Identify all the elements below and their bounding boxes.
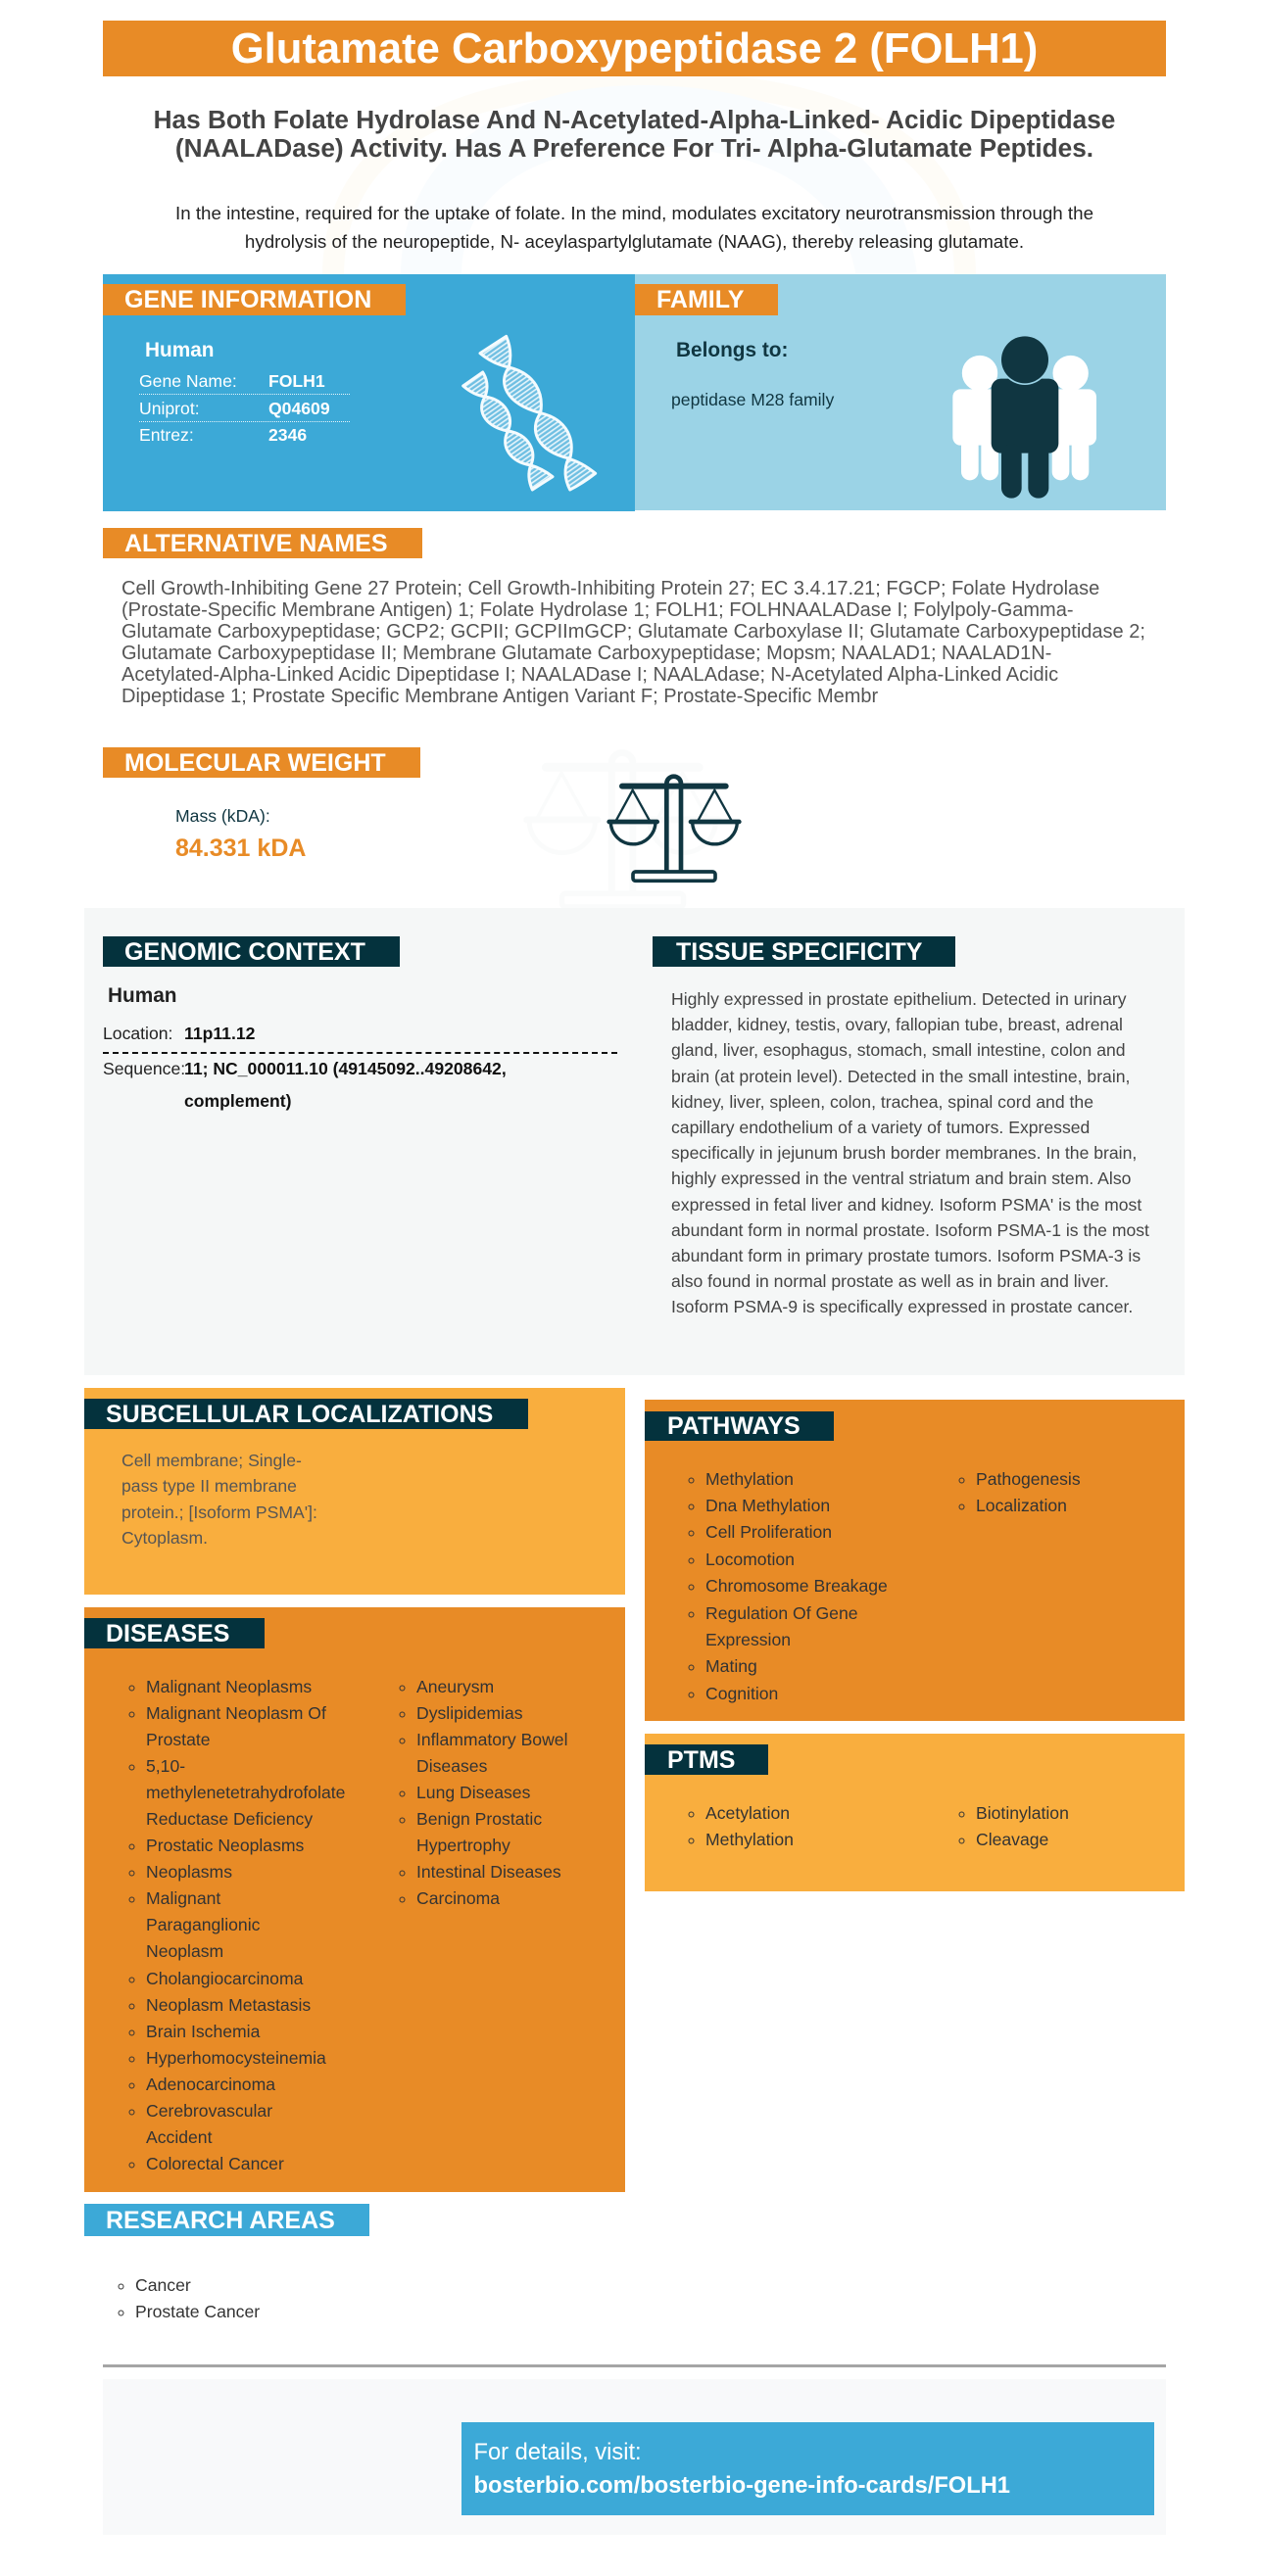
gene name row — [139, 369, 350, 395]
gene name row: Gene Name: — [139, 371, 237, 391]
tissue specificity text: expressed in fetal liver and kidney. Isoform PSMA' is the most — [671, 1195, 1141, 1215]
title: Glutamate Carboxypeptidase 2 (FOLH1) — [231, 25, 1038, 72]
heading: diseases: DISEASES — [106, 1620, 229, 1647]
panel: family — [635, 274, 1166, 510]
diseases list column 2: Hypertrophy — [416, 1836, 510, 1855]
heading: diseases — [84, 1618, 265, 1648]
panel: diseases — [84, 1607, 625, 2192]
alternative names text: (Prostate-Specific Membrane Antigen) 1; Folate Hydrolase 1; FOLH1; FOLHNAALADase I; Folylpoly-Gamma- — [121, 599, 1073, 621]
callout label: For details, visit: — [474, 2439, 642, 2464]
panel: genomic context and tissue specificity — [84, 908, 1185, 1375]
pathways list column 1: Chromosome Breakage — [705, 1576, 888, 1596]
subcellular text: pass type II membrane — [121, 1476, 297, 1496]
sequence row: 11; NC_000011.10 (49145092..49208642, — [184, 1059, 507, 1078]
pathways list column 1: Methylation — [705, 1469, 794, 1489]
alternative names text — [121, 578, 1145, 707]
diseases list column 1: methylenetetrahydrofolate — [146, 1783, 345, 1802]
tissue specificity text: bladder, kidney, testis, ovary, fallopian tube, breast, adrenal — [671, 1015, 1123, 1034]
diseases list column 1: Hyperhomocysteinemia — [146, 2048, 326, 2068]
diseases list column 1: Adenocarcinoma — [146, 2075, 275, 2094]
gene name row: FOLH1 — [268, 371, 325, 391]
alternative names text: Cell Growth-Inhibiting Gene 27 Protein; Cell Growth-Inhibiting Protein 27; EC 3.4.17.21; FGCP; Folate Hydrolase — [121, 578, 1099, 599]
pathways list column 2: Pathogenesis — [976, 1469, 1081, 1489]
panel: gene information — [103, 274, 635, 511]
ptms list column 1: Methylation — [705, 1830, 794, 1849]
diseases list column 2: Inflammatory Bowel — [416, 1730, 568, 1749]
pathways list column 1 — [688, 1469, 888, 1703]
pathways list column 1: Expression — [705, 1630, 791, 1649]
divider — [103, 2364, 1166, 2366]
ptms list column 2 — [958, 1802, 1069, 1849]
belongs to label: Belongs to: — [676, 339, 788, 361]
ptms list column 2: Cleavage — [976, 1830, 1048, 1849]
location row: Location: — [103, 1024, 172, 1043]
pathways list column 1: Locomotion — [705, 1550, 795, 1569]
tissue specificity text: highly expressed in the ventral striatum and brain stem. Also — [671, 1169, 1131, 1188]
alternative names text: Acetylated-Alpha-Linked Acidic Dipeptidase I; NAALADase I; NAALAdase; N-Acetylated Alpha-Linked Acidic — [121, 664, 1058, 686]
entrez row — [139, 425, 307, 445]
description — [175, 202, 1093, 252]
icon: group of people — [952, 336, 1096, 499]
background watermark — [0, 0, 1262, 294]
tissue specificity text: abundant form in primary prostate tumors. Isoform PSMA-3 is — [671, 1246, 1141, 1265]
diseases list column 1 — [129, 1677, 345, 2173]
subtitle — [154, 104, 1115, 163]
pathways list column 1: Mating — [705, 1656, 757, 1676]
diseases list column 1: Brain Ischemia — [146, 2022, 260, 2041]
tissue specificity text — [671, 989, 1149, 1316]
diseases list column 1: Neoplasm — [146, 1941, 223, 1961]
subtitle: (NAALADase) Activity. Has A Preference For Tri- Alpha-Glutamate Peptides. — [175, 133, 1093, 163]
tissue specificity text: also found in normal prostate as well as in brain and liver. — [671, 1271, 1109, 1291]
heading: tissue specificity: TISSUE SPECIFICITY — [676, 938, 922, 966]
diseases list column 1: Prostatic Neoplasms — [146, 1836, 304, 1855]
diseases list column 1: Cerebrovascular — [146, 2101, 272, 2121]
subcellular text — [121, 1451, 317, 1548]
ptms list column 1 — [688, 1802, 794, 1849]
sequence row — [103, 1059, 507, 1111]
pathways list column 1: Cell Proliferation — [705, 1522, 832, 1542]
ptms list column 1: Acetylation — [705, 1802, 790, 1822]
family value: peptidase M28 family — [671, 390, 834, 409]
diseases list column 1: Malignant Neoplasms — [146, 1677, 312, 1696]
icon: dna helix — [461, 335, 598, 492]
heading: family: FAMILY — [656, 286, 744, 313]
icon: balance scale — [607, 774, 742, 883]
ptms list column 2: Biotinylation — [976, 1802, 1069, 1822]
heading: ptms: PTMS — [667, 1746, 735, 1774]
uniprot row: Q04609 — [268, 399, 330, 418]
species label: Human — [145, 339, 214, 361]
diseases list column 1: 5,10- — [146, 1756, 185, 1776]
subcellular text: Cell membrane; Single- — [121, 1451, 302, 1470]
panel: subcellular localizations — [84, 1388, 625, 1595]
callout url: bosterbio.com/bosterbio-gene-info-cards/FOLH1 — [474, 2473, 1010, 2499]
alternative names text: Glutamate Carboxypeptidase II; Membrane Glutamate Carboxypeptidase; Mopsm; NAALAD1; NAALAD1N- — [121, 643, 1051, 664]
research areas list: Cancer — [135, 2275, 191, 2295]
alternative names text: Dipeptidase 1; Prostate Specific Membrane Antigen Variant F; Prostate-Specific Membr — [121, 686, 878, 707]
diseases list column 2: Dyslipidemias — [416, 1703, 523, 1723]
heading: ptms — [645, 1744, 768, 1775]
pathways list column 2 — [958, 1469, 1081, 1515]
heading: research areas: RESEARCH AREAS — [106, 2207, 335, 2234]
species label: Human — [108, 984, 176, 1007]
tissue specificity text: specifically in jejunum brush border membranes. In the brain, — [671, 1143, 1137, 1163]
pathways list column 1: Regulation Of Gene — [705, 1603, 858, 1623]
diseases list column 1: Paraganglionic — [146, 1915, 260, 1934]
diseases list column 2: Aneurysm — [416, 1677, 494, 1696]
location row — [103, 1018, 617, 1054]
diseases list column 1: Reductase Deficiency — [146, 1809, 313, 1829]
mass label: Mass (kDA): — [175, 806, 270, 826]
diseases list column 2: Intestinal Diseases — [416, 1862, 561, 1882]
diseases list column 1: Colorectal Cancer — [146, 2154, 284, 2173]
uniprot row — [139, 397, 350, 422]
entrez row: 2346 — [268, 425, 307, 445]
heading: subcellular localizations: SUBCELLULAR LOCALIZATIONS — [106, 1401, 493, 1428]
heading: gene information: GENE INFORMATION — [124, 286, 371, 313]
diseases list column 1: Prostate — [146, 1730, 211, 1749]
diseases list column 1: Malignant — [146, 1888, 220, 1908]
diseases list column 1: Neoplasm Metastasis — [146, 1995, 311, 2015]
diseases list column 1: Malignant Neoplasm Of — [146, 1703, 326, 1723]
heading: pathways: PATHWAYS — [667, 1412, 801, 1440]
uniprot row: Uniprot: — [139, 399, 200, 418]
mass value: 84.331 kDA — [175, 835, 306, 862]
pathways list column 1: Cognition — [705, 1684, 778, 1703]
subcellular text: Cytoplasm. — [121, 1528, 208, 1548]
location row: 11p11.12 — [184, 1024, 255, 1043]
diseases list column 1: Accident — [146, 2127, 212, 2147]
panel: pathways — [645, 1400, 1185, 1721]
sequence row: complement) — [184, 1091, 292, 1111]
research areas list: Prostate Cancer — [135, 2302, 260, 2321]
pathways list column 2: Localization — [976, 1496, 1067, 1515]
subtitle: Has Both Folate Hydrolase And N-Acetylated-Alpha-Linked- Acidic Dipeptidase — [154, 104, 1115, 133]
tissue specificity text: kidney, liver, spleen, colon, trachea, spinal cord and the — [671, 1092, 1093, 1112]
diseases list column 2 — [400, 1677, 568, 1908]
diseases list column 1: Cholangiocarcinoma — [146, 1969, 303, 1988]
title — [103, 21, 1166, 76]
diseases list column 1: Neoplasms — [146, 1862, 232, 1882]
tissue specificity text: Highly expressed in prostate epithelium. Detected in urinary — [671, 989, 1127, 1009]
panel: footer — [103, 2378, 1166, 2535]
diseases list column 2: Lung Diseases — [416, 1783, 530, 1802]
subcellular text: protein.; [Isoform PSMA']: — [121, 1503, 317, 1522]
tissue specificity text: capillary endothelium of a variety of tumors. Expressed — [671, 1118, 1090, 1137]
description: hydrolysis of the neuropeptide, N- aceylaspartylglutamate (NAAG), thereby releasing glutamate. — [245, 231, 1024, 251]
callout: details link — [461, 2421, 1154, 2515]
heading: molecular weight: MOLECULAR WEIGHT — [124, 749, 386, 777]
tissue specificity text: gland, liver, esophagus, stomach, small intestine, colon and — [671, 1040, 1126, 1060]
entrez row: Entrez: — [139, 425, 194, 445]
research areas list — [118, 2275, 260, 2321]
pathways list column 1: Dna Methylation — [705, 1496, 830, 1515]
tissue specificity text: brain (at protein level). Detected in the small intestine, brain, — [671, 1067, 1130, 1086]
heading: pathways — [645, 1411, 834, 1441]
diseases list column 2: Diseases — [416, 1756, 487, 1776]
alternative names text: Glutamate Carboxypeptidase; GCP2; GCPII; GCPIImGCP; Glutamate Carboxylase II; Glutamate Carboxypeptidase 2; — [121, 621, 1145, 643]
description: In the intestine, required for the uptake of folate. In the mind, modulates excitatory neurotransmission through the — [175, 202, 1093, 223]
diseases list column 2: Benign Prostatic — [416, 1809, 542, 1829]
tissue specificity text: abundant form in normal prostate. Isoform PSMA-1 is the most — [671, 1220, 1149, 1240]
heading: alternative names: ALTERNATIVE NAMES — [124, 530, 388, 557]
heading: research areas — [84, 2204, 369, 2236]
panel: ptms — [645, 1734, 1185, 1891]
heading: genomic context: GENOMIC CONTEXT — [124, 938, 365, 966]
sequence row: Sequence: — [103, 1059, 185, 1078]
diseases list column 2: Carcinoma — [416, 1888, 500, 1908]
heading: family — [635, 284, 778, 315]
tissue specificity text: Isoform PSMA-9 is specifically expressed in prostate cancer. — [671, 1297, 1133, 1316]
